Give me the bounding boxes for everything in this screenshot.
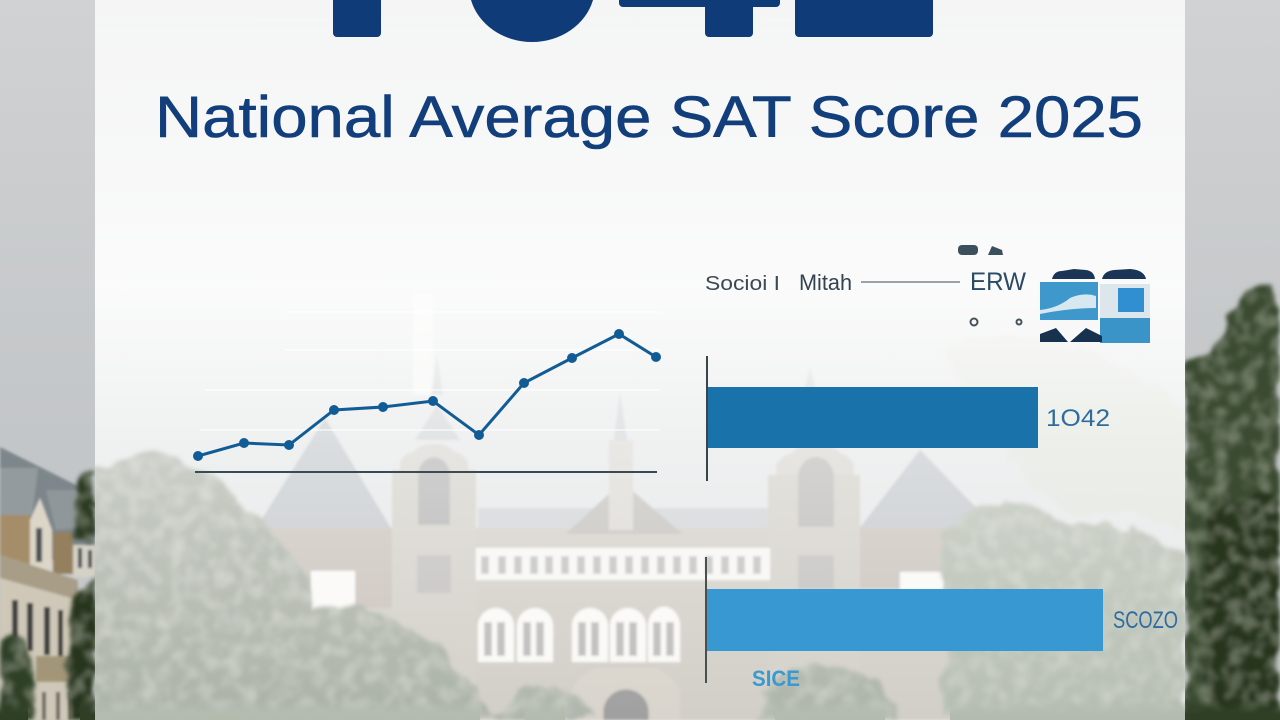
right side tree — [1185, 287, 1280, 720]
legend: ERW — [970, 268, 1026, 296]
bar chart: upper bar — [707, 356, 1110, 481]
bar chart: upper bar: 1O42 — [1046, 405, 1110, 432]
bar chart: lower bar — [706, 557, 1178, 683]
right tree base strip — [1185, 700, 1280, 720]
icon: small car glyph — [958, 245, 1003, 255]
left tree base strips — [0, 700, 95, 720]
icon: small dots — [970, 318, 1022, 326]
legend: Socioi I — [705, 273, 780, 295]
trees inside panel — [95, 449, 1185, 720]
main university building — [255, 295, 1000, 720]
lower bar caption: SICE — [752, 666, 800, 691]
legend — [705, 268, 1026, 296]
tree base strips — [95, 702, 1185, 720]
legend thumbnail image — [1040, 269, 1150, 343]
left side trees — [0, 474, 95, 720]
left side building — [0, 447, 95, 720]
legend: Mitah — [799, 270, 852, 295]
large score digits (cropped at top) — [333, 0, 933, 42]
bar chart: lower bar: SCOZO — [1113, 607, 1178, 634]
line chart — [193, 312, 661, 472]
title: National Average SAT Score 2025 — [155, 85, 1143, 150]
